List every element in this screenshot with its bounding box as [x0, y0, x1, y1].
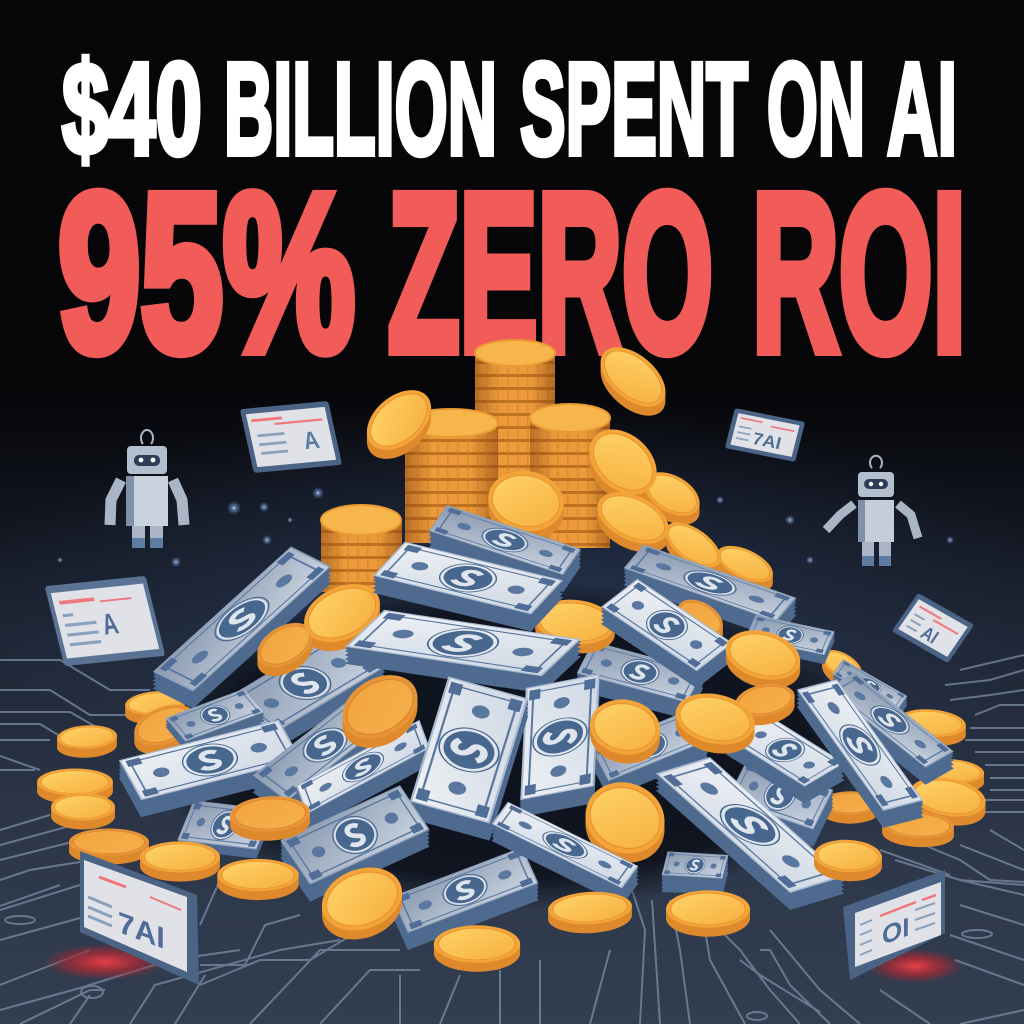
- headline line 1: [62, 35, 957, 182]
- floating screen: top left: [240, 401, 342, 473]
- coin stack: rear left: [404, 409, 498, 543]
- circuit board floor: [0, 655, 1024, 1024]
- headline line 1: ON: [767, 35, 865, 182]
- headline line 2: [58, 148, 966, 398]
- background glow: [0, 400, 1024, 800]
- headline line 1: AI: [887, 35, 957, 182]
- coins: mid layer: [250, 573, 729, 676]
- standing screen: bottom left: 7AI: [118, 905, 165, 956]
- sparkles: [57, 487, 954, 567]
- standing screen: bottom left: [43, 851, 199, 985]
- headline line 1: $40: [62, 35, 202, 182]
- floating screen: mid left: A: [99, 608, 122, 641]
- headline line 2: 95%: [58, 148, 355, 398]
- floating screen: top right: 7AI: [751, 429, 783, 453]
- floating screen: mid right: AI: [917, 622, 943, 648]
- scattered coins: behind pile: [37, 336, 989, 840]
- coin and banknote pile: [37, 336, 989, 963]
- coins: front right cluster: [586, 623, 806, 760]
- headline line 2: ZERO: [388, 148, 713, 398]
- coin stack: left: [321, 505, 402, 592]
- robot: left: [110, 430, 184, 548]
- floating screen: top right: [725, 408, 805, 462]
- standing screen: bottom right: OI: [882, 912, 909, 951]
- floating screen: mid left: [45, 576, 165, 666]
- robot: right: [826, 456, 918, 566]
- coin stack: rear right: [530, 404, 610, 548]
- banknotes: front upper layer: [119, 542, 733, 885]
- floating screen: top left: A: [301, 426, 322, 454]
- banknotes: back layer: [153, 505, 907, 879]
- floating screen: mid right: [892, 593, 974, 663]
- coin stack: rear top: [475, 340, 555, 513]
- headline line 1: SPENT: [520, 35, 748, 182]
- banknotes: front lower layer: [392, 672, 954, 933]
- standing screen: bottom right: [843, 870, 963, 983]
- headline line 1: BILLION: [224, 35, 497, 182]
- coins: foreground: [69, 794, 883, 963]
- pile shadow: [140, 580, 880, 910]
